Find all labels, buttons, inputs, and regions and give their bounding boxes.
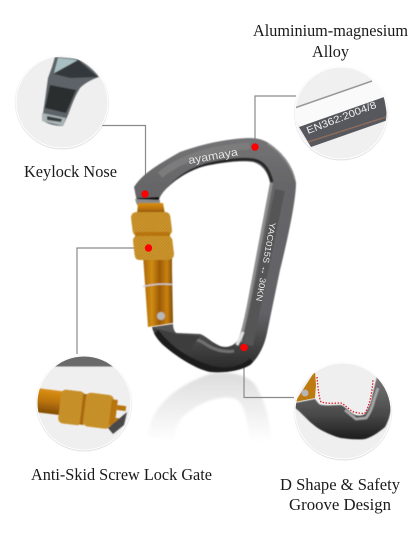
label: keylock nose: Keylock Nose [24,162,117,181]
label: D shape and safety groove: Groove Design [289,495,391,514]
model text: YAC015S ↔ 30KN [254,222,278,302]
red marker dots [141,143,259,351]
dotted outline [317,377,373,413]
panel: keylock nose [16,56,108,148]
gate end [295,371,316,402]
carabiner reflection [148,373,271,442]
label: aluminium-magnesium alloy: Aluminium-magnesium [253,21,408,40]
screw gate [131,203,174,327]
label: D shape and safety groove [280,475,401,514]
label: aluminium-magnesium alloy: Alloy [312,42,350,61]
stamp text: EN362:2004/8 [305,100,379,137]
panel: screw lock gate [36,356,132,452]
panel: D shape and safety groove [295,363,392,459]
label: aluminium-magnesium alloy [253,21,408,61]
carabiner [131,138,296,372]
groove body [295,376,392,439]
carabiner spine [134,138,296,372]
connector lines [77,96,296,398]
panel: aluminium-magnesium alloy [295,67,388,159]
label: screw lock gate: Anti-Skid Screw Lock Gate [31,465,212,484]
label: D shape and safety groove: D Shape & Safety [280,475,401,494]
brand text: ayamaya [187,146,240,167]
